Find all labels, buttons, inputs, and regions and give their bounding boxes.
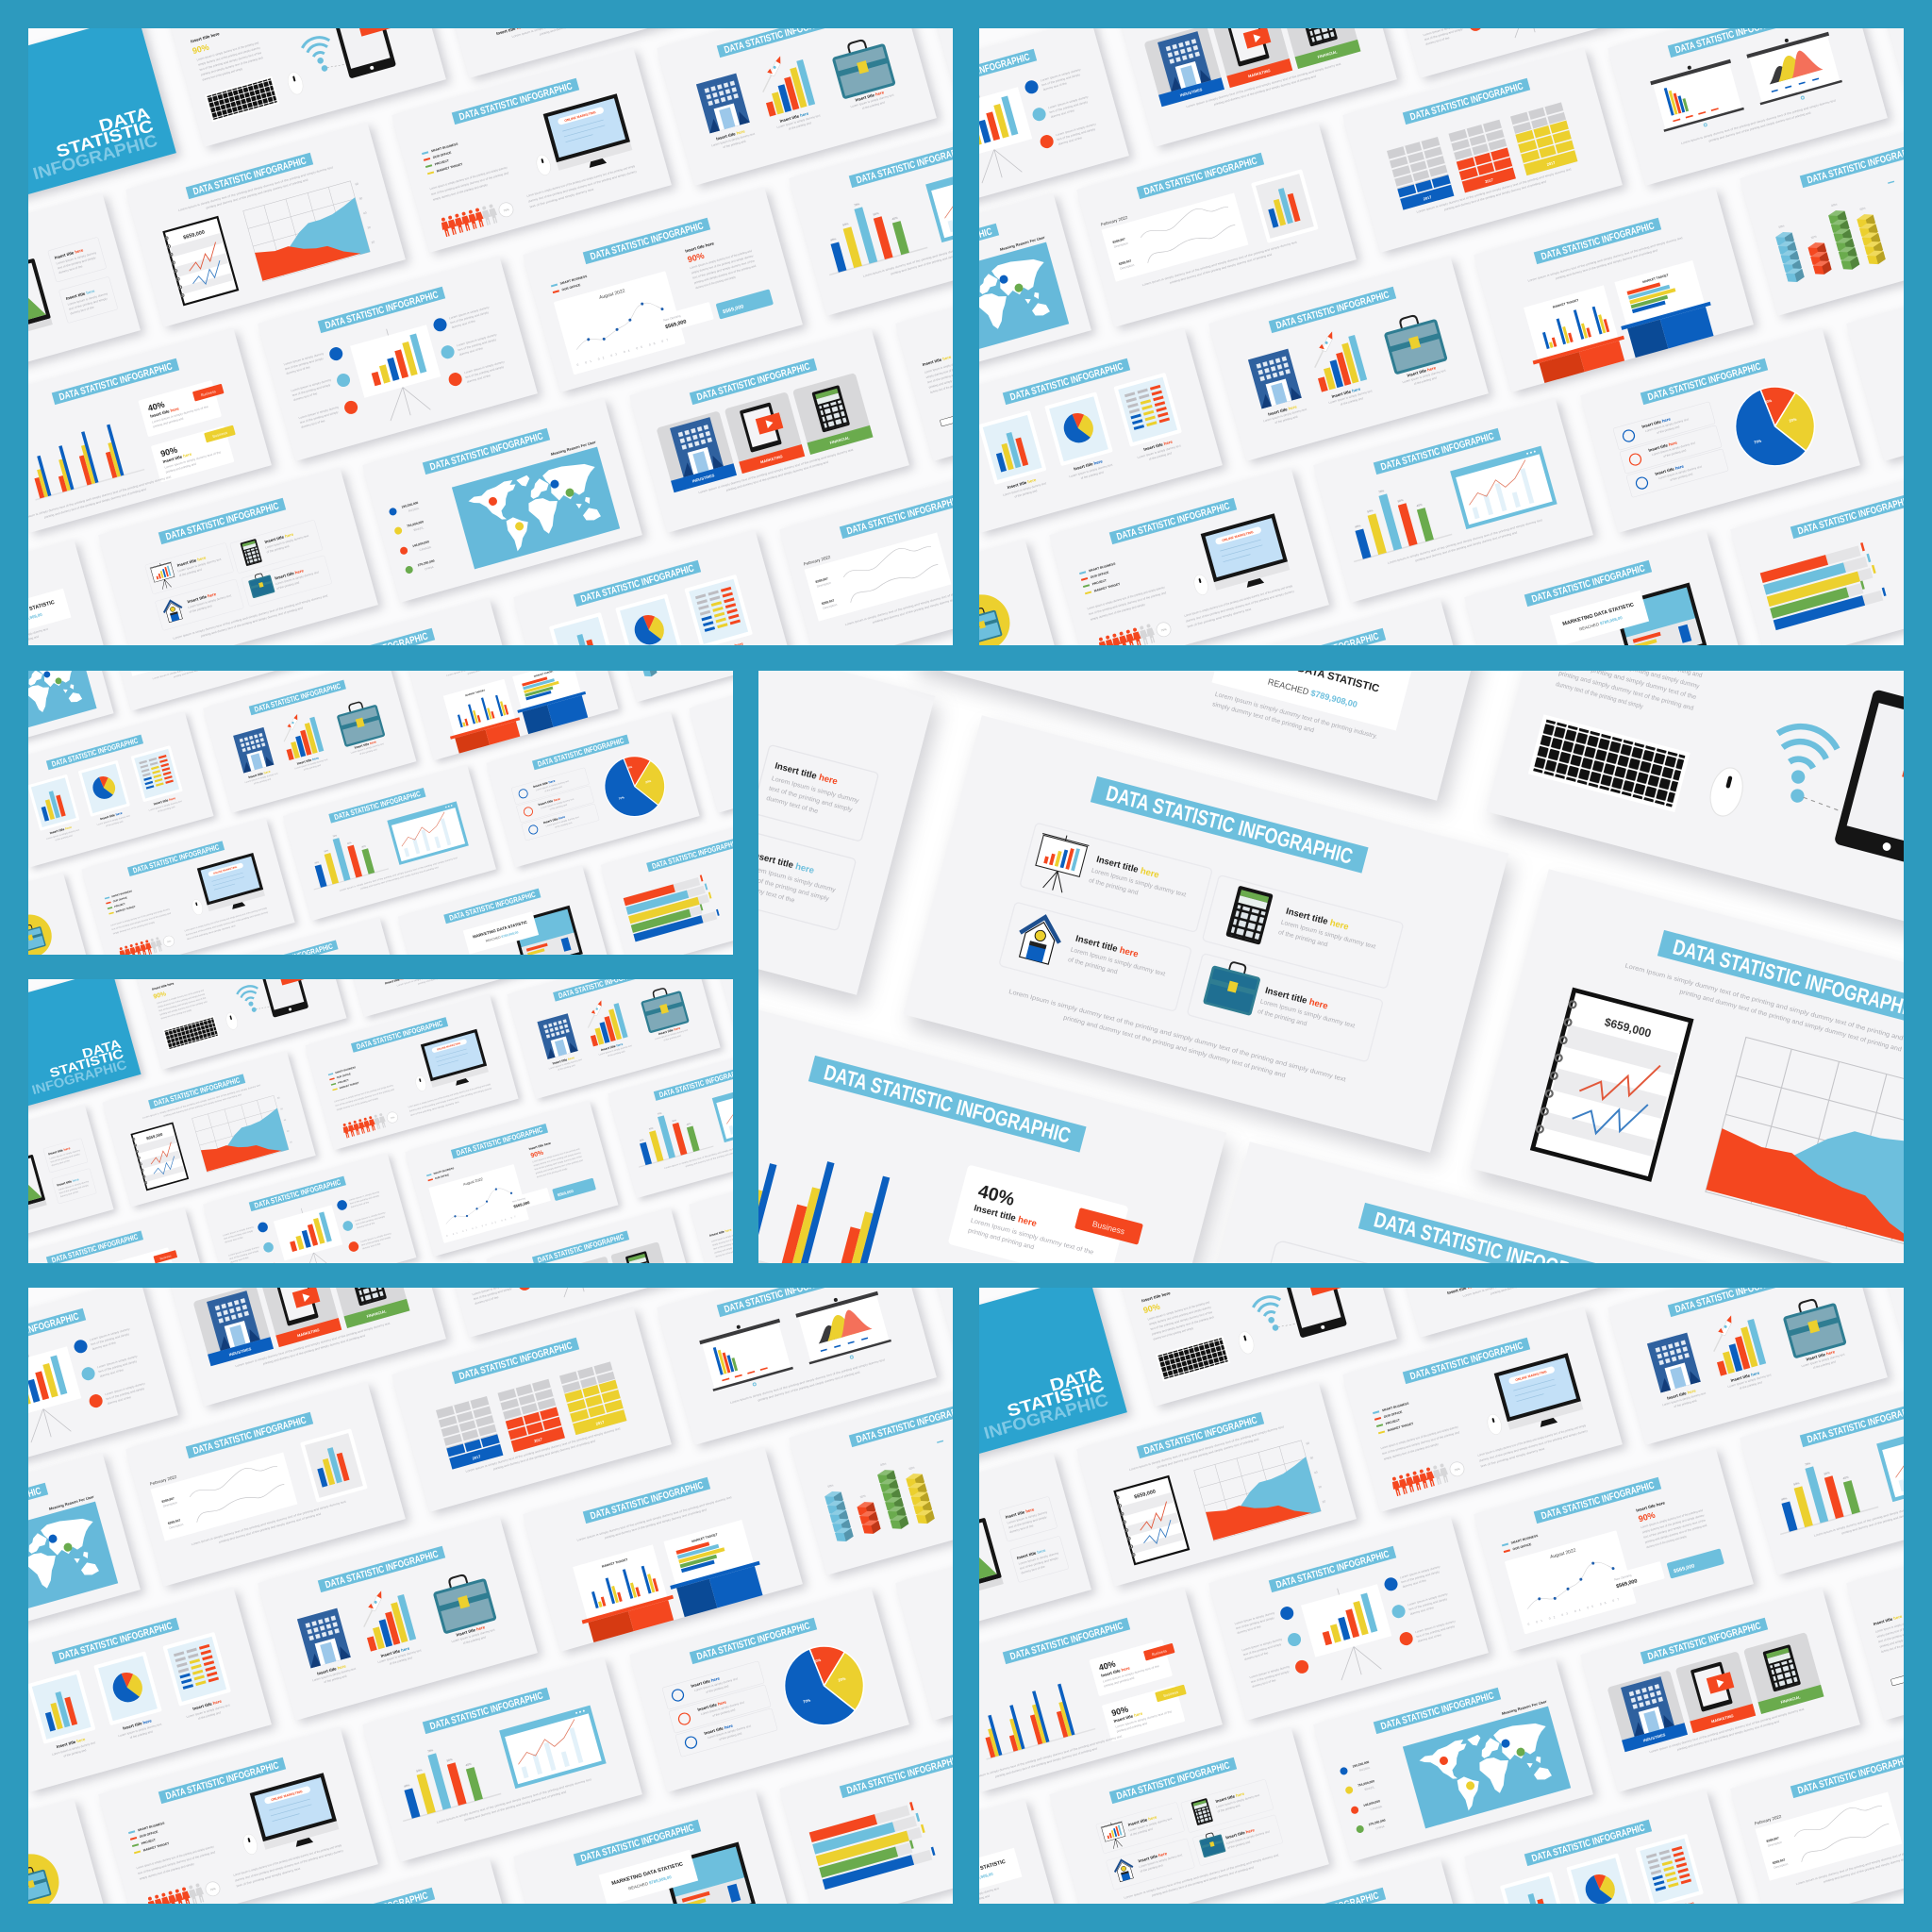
slide: four icons close-up — [901, 715, 1517, 1164]
chart: pie: 10% — [1764, 398, 1773, 405]
chart: grouped bars — [22, 419, 144, 500]
item: house — [155, 579, 244, 630]
heading — [583, 218, 710, 264]
insert title text — [190, 31, 221, 43]
item: easel — [145, 542, 234, 594]
screen: peaks — [1745, 27, 1844, 110]
slide: easel with circles — [258, 256, 542, 466]
legend — [389, 500, 438, 576]
cube stack blue — [1773, 223, 1806, 284]
slide: grouped bars and stat cards — [0, 327, 276, 540]
podium blue — [1621, 302, 1719, 359]
slide: right edge text — [895, 256, 1180, 466]
chart: world map — [452, 447, 620, 569]
icon: yellow circle briefcase — [946, 588, 1016, 658]
chart: line: August 2022 — [599, 289, 625, 301]
card: marketing: MARKETING — [759, 454, 783, 464]
slide: marketing data statistic monitor — [1464, 529, 1749, 740]
card: marketing — [724, 391, 805, 474]
captions — [572, 640, 754, 704]
white chart card: $289,907 — [821, 598, 835, 606]
legend — [1888, 181, 1894, 183]
chart: pie: 20% — [1789, 417, 1797, 424]
panel: close-up of slides, centre right — [327, 363, 1932, 1591]
screen: bars — [1649, 55, 1746, 138]
slide: map left — [811, 192, 1096, 403]
paragraph — [844, 580, 1002, 631]
insert title: Insert title here — [685, 241, 715, 254]
paragraph — [196, 41, 265, 82]
chart: bars: 50% — [873, 211, 879, 217]
card: financial: FINANCIAL — [829, 435, 851, 445]
slide: list items close-up — [327, 558, 943, 1007]
paragraph: text of the printing and simply dummy text — [529, 188, 594, 208]
marketing card: MARKETING DATA STATISTIC — [1562, 602, 1635, 627]
heading — [423, 428, 550, 475]
heading — [52, 358, 179, 405]
slide: bars and browser — [1313, 397, 1598, 608]
stat card 40%: 40% — [147, 400, 166, 413]
slide: text only — [431, 0, 716, 83]
heading — [717, 11, 844, 58]
caption — [495, 24, 526, 36]
legend — [551, 275, 590, 294]
paragraph: dummy text of the printing and simply dummy text of the printing and simply dummy — [527, 170, 638, 204]
chart: bars: 40% — [891, 216, 898, 221]
slide: blank right — [1874, 0, 1932, 117]
panel: slide wall two, bottom left — [0, 1132, 1208, 1932]
grid column 2017 red — [1449, 120, 1516, 192]
white value card: New Opening — [663, 314, 681, 323]
list item — [48, 237, 107, 282]
panel: zoomed slide wall one, lower middle left — [0, 860, 927, 1629]
stat card 40%: printing and printing and — [153, 417, 184, 428]
month label: February 2022 — [803, 555, 831, 567]
legend: PROJECT — [434, 158, 449, 166]
card: market target hbars — [1614, 260, 1705, 325]
slide: pie and items — [1580, 327, 1865, 538]
heading — [186, 153, 313, 199]
chart: bars: 70% — [854, 202, 860, 208]
slide: bars and cards close-up — [599, 990, 1235, 1443]
captions — [1641, 412, 1704, 486]
paragraph — [173, 593, 329, 645]
marketing card — [0, 589, 71, 641]
chart: area: 60 — [355, 182, 359, 187]
icon: notebook: $659,000 — [183, 229, 206, 242]
paragraph — [177, 165, 335, 217]
card: pie — [615, 593, 684, 668]
card: bars — [549, 612, 617, 687]
legend: 146,000,000 — [412, 540, 430, 548]
browser chart — [925, 159, 1033, 242]
chart: rocket bars — [755, 50, 815, 117]
slide: tablet and list items — [0, 192, 145, 403]
icon: building — [696, 74, 750, 133]
cube stack yellow — [1854, 205, 1887, 267]
paragraph — [4, 627, 50, 647]
slide: projection screens — [1607, 0, 1892, 191]
legend: 190,260,000 — [401, 501, 419, 509]
chart: pie — [1726, 377, 1824, 475]
icon: mouse — [286, 71, 306, 96]
slide: keyboard and tablet — [166, 0, 451, 152]
slide: marketing card close-up — [908, 363, 1524, 812]
slide: yellow briefcase circle — [783, 539, 1068, 749]
paragraph — [429, 165, 511, 202]
caption — [922, 355, 952, 367]
slide: industries top — [1117, 0, 1402, 152]
legend: CANADA — [419, 545, 432, 552]
heading — [1358, 1203, 1637, 1300]
card: industries — [656, 410, 737, 492]
panel: zoomed slide wall two, middle left — [0, 364, 927, 1076]
blue value card — [716, 289, 774, 320]
icon: people — [440, 204, 499, 238]
legend: CHINA — [425, 565, 435, 571]
chart: area: 20 — [371, 240, 375, 244]
icon: keyboard — [205, 76, 279, 123]
slide: easel top middle — [1382, 0, 1667, 83]
paragraph — [690, 249, 758, 290]
chart: horizontal bars — [1759, 541, 1888, 630]
paragraph — [1527, 236, 1685, 288]
heading — [1534, 218, 1661, 264]
legend: SMART BUSINESS — [559, 275, 588, 286]
paragraphs — [283, 306, 508, 430]
icon: briefcase — [831, 35, 894, 98]
percent ring — [497, 201, 515, 219]
icon: notebook — [163, 217, 238, 305]
slide: industries marketing financial — [629, 327, 914, 538]
chart: area: 50 — [358, 196, 363, 201]
paragraph — [698, 448, 855, 500]
slide: stacked grids — [1342, 47, 1627, 258]
blue value card: $569,000 — [723, 304, 744, 315]
card: financial — [792, 373, 874, 455]
cover title — [24, 104, 159, 183]
legend — [422, 142, 465, 175]
grid column 2017 blue — [1387, 137, 1454, 210]
panel: slide wall one, bottom right — [783, 1132, 1932, 1932]
podium red — [1533, 336, 1630, 385]
legend: OUR OFFICE — [432, 151, 453, 159]
card: market target bars: MARKET TARGET — [1552, 298, 1579, 309]
grid column 2017 yellow: 2017 — [1546, 159, 1557, 167]
slide: market target podiums — [1474, 187, 1758, 397]
paragraph: simply dummy text of the printing and — [1211, 701, 1315, 734]
slide: four icon items — [98, 467, 383, 677]
marketing card — [1211, 615, 1413, 731]
card: market target hbars: MARKET TARGET — [1642, 274, 1669, 284]
slide: partial bottom — [0, 672, 266, 882]
circles right — [432, 317, 463, 388]
chart: bars: 40% — [830, 237, 837, 242]
heading — [158, 498, 286, 544]
slide: bottom title close-up — [1169, 1141, 1785, 1591]
heading — [574, 560, 701, 607]
percent ring: 75% — [503, 208, 509, 213]
heading — [1524, 560, 1652, 607]
chart: area — [243, 179, 377, 282]
small bars card — [954, 508, 1022, 583]
heading — [849, 142, 976, 188]
legend: SMART BUSINESS — [430, 142, 459, 153]
panel: slide wall two, top right — [783, 0, 1932, 808]
card: industries: INDUSTRIES — [691, 473, 715, 484]
heading — [1668, 11, 1795, 58]
chart: line — [554, 271, 686, 375]
monitor — [1613, 583, 1707, 668]
cube stack green — [1825, 201, 1860, 272]
stat card 40% — [138, 378, 230, 437]
heading — [1641, 358, 1768, 405]
captions — [709, 88, 895, 152]
paragraph — [16, 475, 173, 526]
panel: slide wall with cover, top left — [28, 28, 953, 645]
slide: world map — [362, 397, 647, 608]
slide: monitor — [1049, 467, 1334, 677]
cube stack red — [1806, 233, 1832, 276]
paragraph — [1416, 167, 1574, 219]
slide: easel top left — [849, 18, 1134, 228]
marketing card — [1550, 591, 1649, 646]
chart: bars: 50% — [842, 222, 849, 227]
cube stack blue: 50% — [1778, 224, 1785, 229]
slide: bars and browser chart — [789, 110, 1074, 321]
heading — [1403, 78, 1530, 125]
slide: three cards — [513, 529, 798, 740]
stat card 90%: Lorem Ipsum is simply dummy text of the — [164, 450, 222, 470]
white value card: $569,000 — [665, 319, 687, 330]
legend: OUR OFFICE — [561, 283, 582, 291]
chart: area: 40 — [363, 210, 367, 215]
slide: notebook and area chart — [125, 122, 410, 332]
map caption: Meaning Reason For User — [550, 440, 597, 457]
slide: horizontal bars — [1730, 461, 1932, 672]
small button — [940, 414, 963, 426]
card: market target bars — [1524, 285, 1618, 359]
stat card 90%: 90% — [159, 445, 178, 458]
stat card 90%: Business — [212, 430, 228, 439]
marketing card: MARKETING DATA STATISTIC — [1231, 645, 1380, 695]
cube stack yellow: 60% — [1859, 207, 1866, 211]
slide: building rocket briefcase — [657, 0, 941, 191]
heading — [308, 628, 435, 675]
slide: building rocket briefcase — [1208, 256, 1493, 466]
paragraph — [1681, 98, 1838, 150]
white chart card: Description — [823, 603, 838, 610]
icon: tablet — [0, 258, 53, 339]
slide: February — [1076, 122, 1361, 332]
paragraph: Lorem Ipsum is simply dummy text of the printing industry. — [1214, 691, 1378, 741]
paragraph — [862, 231, 1020, 283]
stat 90%: 90% — [687, 251, 706, 264]
white chart card: Description — [816, 581, 832, 589]
white chart card: $289,907 — [815, 576, 828, 584]
marketing card: REACHED $789,908,00 — [1579, 615, 1624, 632]
building tip — [1296, 1270, 1371, 1345]
legend: RUSSIA — [408, 507, 421, 513]
icon: wifi — [301, 32, 346, 75]
slide: blank right — [1846, 256, 1932, 466]
slide: blank right — [923, 0, 1208, 117]
list item — [58, 276, 118, 324]
slide: notebook close-up — [1468, 869, 1932, 1318]
slide: keyboard close-up — [1484, 512, 1932, 961]
slide: three cards — [942, 327, 1227, 538]
cover title: INFOGRAPHIC — [31, 131, 159, 183]
cover title: STATISTIC — [54, 116, 156, 161]
slide: title only lower left — [247, 597, 532, 808]
heading — [1790, 492, 1918, 539]
legend: 754,000,000 — [407, 520, 425, 528]
slide: marketing card left — [0, 539, 117, 749]
paragraph — [924, 353, 992, 394]
stat card 90%: printing and printing and — [165, 462, 197, 475]
stat card 90% — [151, 424, 242, 482]
chart: area: 30 — [367, 225, 372, 230]
item: calculator — [230, 520, 323, 574]
chart: line: 0 01 02 03 04 05 06 07 — [576, 338, 669, 367]
marketing card: REACHED $789,908,00 — [1267, 677, 1358, 709]
slide: title only — [1198, 597, 1483, 808]
heading — [452, 78, 579, 125]
white value card — [658, 302, 714, 334]
slide: cubes — [1740, 110, 1932, 321]
paragraph: Lorem Ipsum is simply dummy text of the printing and simply dummy text of the printing and simply — [526, 164, 636, 198]
heading — [690, 358, 817, 405]
legend: MARKET TARGET — [436, 162, 463, 174]
icon: monitor: ONLINE MARKETING — [564, 110, 596, 123]
heading — [840, 492, 967, 539]
grid column 2017 yellow — [1510, 102, 1577, 175]
legend: 270,260,000 — [417, 558, 435, 567]
heading — [318, 287, 445, 333]
slide: line chart — [523, 187, 808, 397]
paragraph — [511, 0, 669, 43]
slide: February chart — [779, 461, 1064, 672]
cover title: DATA — [97, 104, 152, 136]
stat card 40%: Business — [200, 389, 216, 397]
paragraph — [526, 164, 639, 208]
stat card 40%: Lorem Ipsum is simply dummy text of the — [151, 405, 209, 425]
heading — [1800, 142, 1927, 188]
board with bars — [350, 325, 441, 398]
stat 90%: 90% — [192, 42, 210, 56]
pale card — [1241, 1240, 1416, 1415]
icon: tablet with video — [330, 0, 412, 79]
white chart card — [805, 532, 951, 622]
cube stack red: 30% — [1810, 235, 1817, 240]
cube stack green: 80% — [1831, 203, 1838, 208]
legend: BRAZIL — [413, 525, 425, 532]
item: briefcase — [242, 556, 332, 607]
icon: mouse — [535, 153, 553, 176]
list items — [1613, 402, 1728, 497]
circles left — [328, 345, 359, 416]
icon: monitor — [543, 93, 634, 176]
chart: bars — [812, 188, 927, 275]
slide: cover — [0, 14, 181, 225]
easel legs — [366, 324, 430, 421]
chart: pie: 70% — [1754, 438, 1762, 444]
grid column 2017 blue: 2017 — [1423, 194, 1433, 201]
slide: monitor and legend — [391, 47, 676, 258]
grid column 2017 red: 2017 — [1485, 177, 1494, 184]
card: table bars — [684, 575, 753, 649]
